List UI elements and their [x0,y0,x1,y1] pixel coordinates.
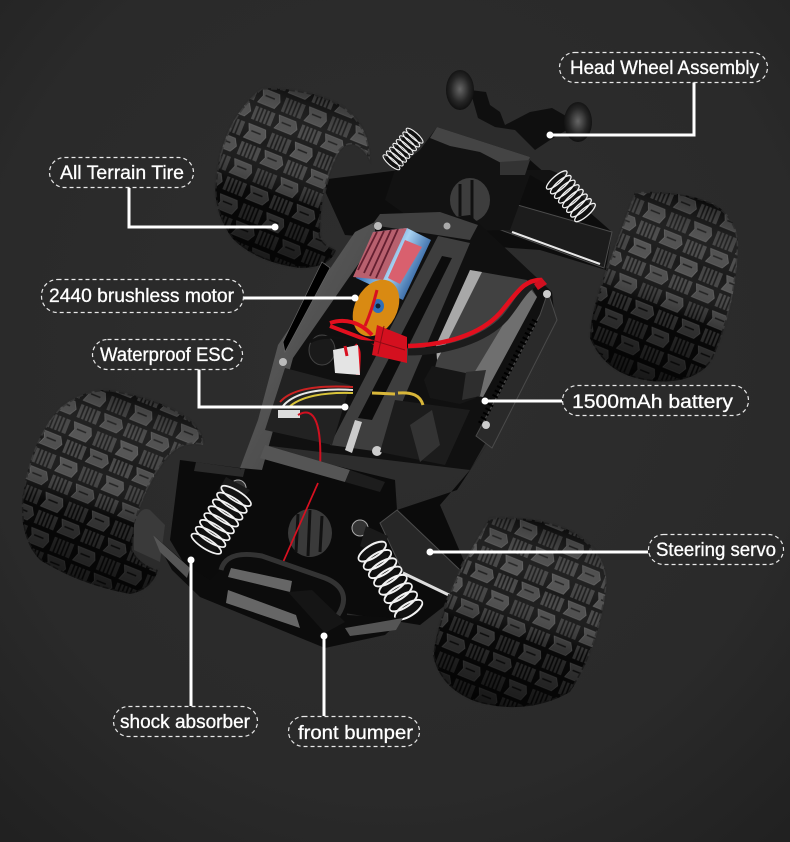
callout: All Terrain Tire: All Terrain Tire [60,163,184,184]
callout: 1500mAh battery [482,386,748,416]
tire: rear right [590,192,738,382]
callout: Head Wheel Assembly: Head Wheel Assembly [570,58,759,79]
chassis tub [240,212,557,470]
callout: 2440 brushless motor: 2440 brushless motor [49,286,235,307]
callout: shock absorber: shock absorber [120,712,251,733]
callout: 2440 brushless motor [42,280,358,312]
motor [343,228,431,344]
front bumper [153,535,403,648]
battery [424,270,537,404]
callout: shock absorber [114,556,258,736]
rear wheelie bar assembly [446,70,592,150]
callout: Waterproof ESC [92,340,348,410]
callout: Steering servo [426,534,784,564]
tire: rear left [215,88,370,268]
tire: front right [433,518,606,707]
red power wires and connector [310,278,547,375]
rear shock absorbers and gear box [381,126,598,232]
front shock absorbers and differential [189,445,425,623]
tire: front left [22,390,203,594]
suspension arms and black undercarriage [170,130,612,625]
callout: 1500mAh battery: 1500mAh battery [572,392,734,413]
callout: Head Wheel Assembly [546,52,768,138]
callout: Steering servo: Steering servo [656,540,776,561]
callout: front bumper: front bumper [298,723,414,744]
callout: All Terrain Tire [50,158,278,230]
ESC signal wires [278,386,423,468]
center spine [330,236,470,452]
electronics floor [265,368,350,445]
callout: front bumper [288,632,420,746]
callout: Waterproof ESC: Waterproof ESC [100,345,234,366]
car: monster truck chassis [22,70,738,707]
